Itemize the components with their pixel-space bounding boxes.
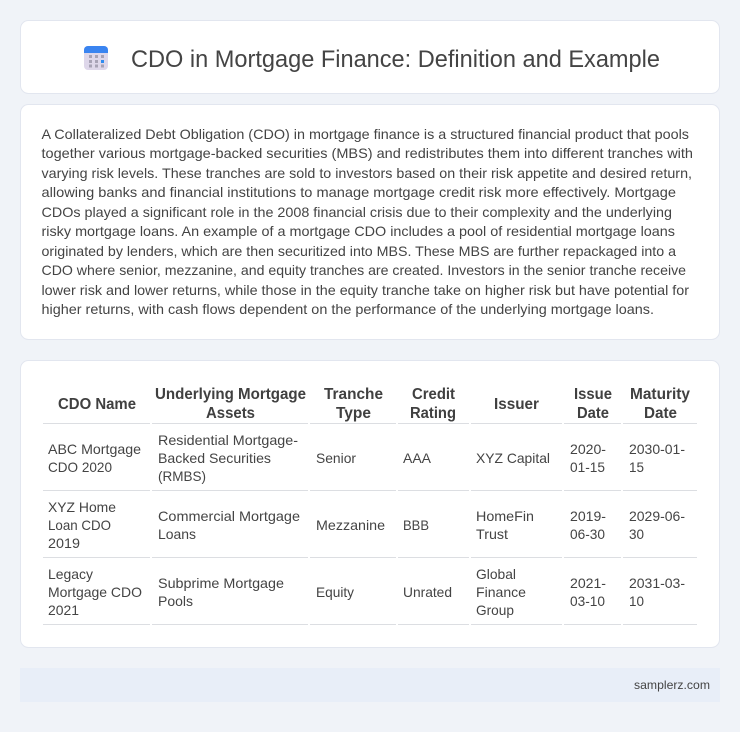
table row: Legacy Mortgage CDO 2021: 2021- — [570, 575, 606, 591]
table row: XYZ Home Loan CDO 2019: Commercial Mortgage — [158, 508, 300, 524]
table row: Legacy Mortgage CDO 2021: Legacy — [48, 566, 93, 582]
text block: definition and example: allowing banks and financial institutions to manage mortgage credit risk more effectively. Mortgage — [42, 184, 676, 200]
panel: definition paragraph — [20, 104, 720, 340]
table row: XYZ Home Loan CDO 2019: HomeFin — [476, 508, 534, 524]
table row: ABC Mortgage CDO 2020: 2020- — [570, 441, 606, 457]
table header row: Underlying Mortgage — [155, 386, 306, 403]
table row: XYZ Home Loan CDO 2019: Trust — [476, 526, 508, 542]
table header row: Tranche — [324, 386, 383, 403]
table row: ABC Mortgage CDO 2020 — [48, 432, 685, 484]
table header row: Type — [336, 405, 371, 422]
header panel — [20, 20, 720, 94]
table row: XYZ Home Loan CDO 2019: 30 — [629, 526, 644, 542]
table header row: Issue — [574, 386, 612, 403]
table header row: Maturity — [630, 386, 690, 403]
table row: ABC Mortgage CDO 2020: Senior — [316, 450, 356, 466]
text block: definition and example: risky mortgage loans. An example of a mortgage CDO includes a pool of residential mortgage loans — [42, 223, 675, 239]
table row: XYZ Home Loan CDO 2019: 2029-06- — [629, 508, 685, 524]
table header row — [58, 386, 690, 422]
text block: definition and example: lower risk and lower returns, while those in the equity tranche take on higher risk but have potential for — [42, 282, 689, 298]
text block: definition and example: together various mortgage-backed securities (MBS) and redistributes them into different tranches with — [42, 145, 693, 161]
text block: definition and example: CDOs played a significant role in the 2008 financial crisis due to their complexity and the underlying — [42, 204, 672, 220]
table header row: CDO Name — [58, 396, 136, 413]
table row: Legacy Mortgage CDO 2021: Subprime Mortgage — [158, 575, 284, 591]
table row: ABC Mortgage CDO 2020: (RMBS) — [158, 468, 206, 484]
table row: ABC Mortgage CDO 2020: 2030-01- — [629, 441, 685, 457]
table row: XYZ Home Loan CDO 2019: 2019 — [48, 535, 80, 551]
table row: Legacy Mortgage CDO 2021: Group — [476, 602, 514, 618]
table row: ABC Mortgage CDO 2020: XYZ Capital — [476, 450, 550, 466]
table row: XYZ Home Loan CDO 2019: Mezzanine — [316, 517, 385, 533]
table header row: Rating — [410, 405, 456, 422]
title: CDO in Mortgage Finance: Definition and Example — [131, 46, 660, 73]
table row: XYZ Home Loan CDO 2019: Loans — [158, 526, 196, 542]
table header row: Assets — [206, 405, 255, 422]
table row: ABC Mortgage CDO 2020: AAA — [403, 450, 432, 466]
table row: XYZ Home Loan CDO 2019 — [48, 499, 685, 551]
table row: ABC Mortgage CDO 2020: 15 — [629, 459, 644, 475]
table row: ABC Mortgage CDO 2020: ABC Mortgage — [48, 441, 141, 457]
text block: definition and example — [42, 126, 693, 317]
table row: XYZ Home Loan CDO 2019: Loan CDO — [48, 517, 111, 533]
table row: XYZ Home Loan CDO 2019: 06-30 — [570, 526, 605, 542]
table row: Legacy Mortgage CDO 2021: 10 — [629, 593, 644, 609]
table header row: Date — [577, 405, 609, 422]
text block: definition and example: higher returns, with cash flows dependent on the performance of the underlying mortgage loans. — [42, 301, 654, 317]
table row: ABC Mortgage CDO 2020: 01-15 — [570, 459, 605, 475]
table header row: Date — [644, 405, 677, 422]
table row: Legacy Mortgage CDO 2021: Unrated — [403, 584, 452, 600]
table row: Legacy Mortgage CDO 2021: Equity — [316, 584, 354, 600]
text block: definition and example: originated by lenders, which are then securitized into MBS. These MBS are further repackaged into a — [42, 243, 676, 259]
text block: definition and example: varying risk levels. These tranches are sold to investors based on their risk appetite and desired return, — [42, 165, 692, 181]
table row: Legacy Mortgage CDO 2021 — [48, 566, 685, 618]
table row: XYZ Home Loan CDO 2019: BBB — [403, 517, 429, 533]
table header row: Issuer — [494, 396, 539, 413]
table row: Legacy Mortgage CDO 2021: 2021 — [48, 602, 79, 618]
table row: Legacy Mortgage CDO 2021: Global — [476, 566, 516, 582]
table row: Legacy Mortgage CDO 2021: Finance — [476, 584, 526, 600]
table row: Legacy Mortgage CDO 2021: Pools — [158, 593, 193, 609]
table row: ABC Mortgage CDO 2020: Residential Mortgage- — [158, 432, 298, 448]
footer text: samplerz.com — [634, 678, 710, 692]
icon: calendar — [84, 46, 108, 70]
table row: XYZ Home Loan CDO 2019: XYZ Home — [48, 499, 116, 515]
table header row: Credit — [412, 386, 456, 403]
footer bar — [20, 668, 720, 702]
table row: XYZ Home Loan CDO 2019: 2019- — [570, 508, 606, 524]
table row: Legacy Mortgage CDO 2021: 03-10 — [570, 593, 605, 609]
panel: CDO table — [20, 360, 720, 648]
table row: Legacy Mortgage CDO 2021: 2031-03- — [629, 575, 685, 591]
table row: Legacy Mortgage CDO 2021: Mortgage CDO — [48, 584, 142, 600]
table row: ABC Mortgage CDO 2020: CDO 2020 — [48, 459, 112, 475]
text block: definition and example: CDO where senior, mezzanine, and equity tranches are created. Investors in the senior tranche receive — [42, 262, 686, 278]
text block: definition and example: A Collateralized Debt Obligation (CDO) in mortgage finance is a structured financial product that pools — [42, 126, 689, 142]
table row: ABC Mortgage CDO 2020: Backed Securities — [158, 450, 271, 466]
